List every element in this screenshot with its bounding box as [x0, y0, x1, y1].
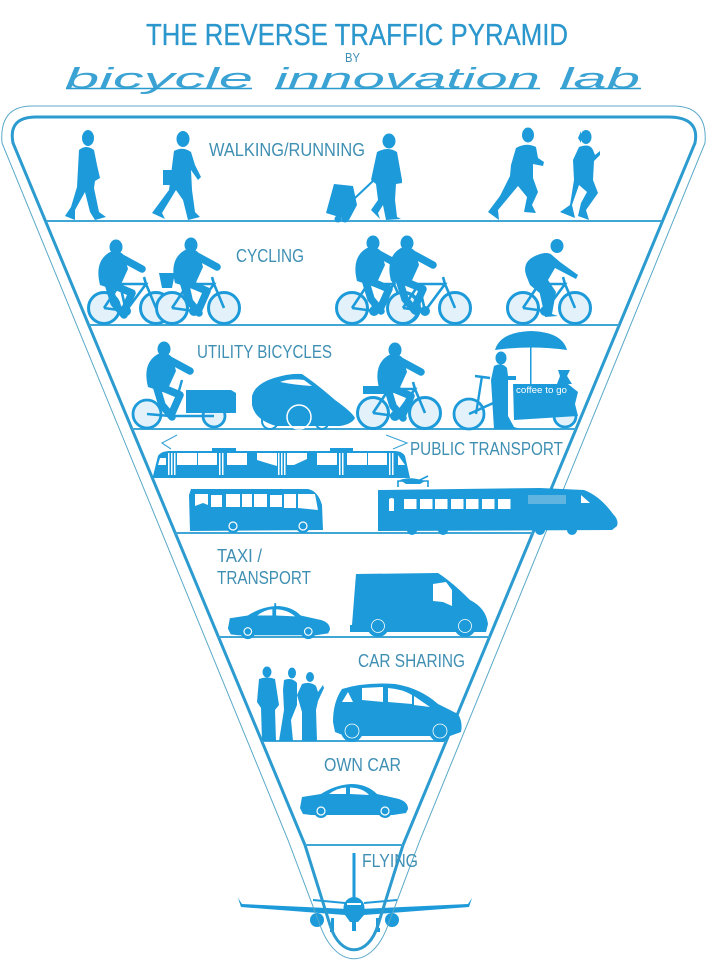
label: taxi / transport: TAXI /: [217, 546, 262, 566]
panel: cycling: [88, 236, 590, 324]
icon: sedan car: [300, 784, 408, 818]
logo: bicycle innovation lab: [65, 63, 641, 95]
label: flying: FLYING: [362, 851, 418, 871]
label: taxi / transport: TRANSPORT: [217, 568, 311, 588]
panel: own car: [300, 755, 408, 818]
icon: velomobile: [252, 374, 355, 429]
label: taxi / transport: [217, 546, 311, 588]
icon: person with shopping trolley: [326, 134, 402, 222]
title: THE REVERSE TRAFFIC PYRAMID: [146, 17, 568, 52]
logo: bicycle innovation lab: lab: [560, 63, 640, 95]
icon: tram: [153, 435, 410, 478]
icon: van: [350, 573, 488, 637]
tier dividers: [46, 221, 662, 845]
icon: high-speed train: [378, 476, 618, 535]
icon: hatchback car: [333, 684, 462, 742]
icon: cyclist 1: [88, 240, 172, 324]
icon: racing cyclist: [508, 239, 590, 324]
icon: airplane: [238, 853, 472, 932]
label: own car: OWN CAR: [324, 755, 401, 775]
label: utility bicycles: UTILITY BICYCLES: [197, 342, 332, 362]
icon: bus: [189, 489, 323, 533]
panel: utility bicycles: [133, 331, 578, 429]
icon: coffee cargo bike with umbrella: [454, 331, 578, 429]
icon: cyclist 2 with basket: [156, 238, 240, 324]
label: walking/running: WALKING/RUNNING: [209, 140, 365, 160]
panel: car sharing: [257, 651, 465, 742]
logo: bicycle innovation lab: bicycle: [65, 63, 253, 95]
icon: taxi: [228, 603, 330, 639]
icon: cargo bike: [133, 342, 236, 428]
icon: runner 1: [488, 128, 544, 220]
label: cycling: CYCLING: [236, 246, 304, 266]
by line: BY: [345, 50, 360, 65]
icon: walker 1: [65, 130, 106, 220]
icon: three people: [257, 666, 324, 741]
label: car sharing: CAR SHARING: [358, 651, 465, 671]
icon: walker 2 with bag: [152, 131, 201, 220]
cart text: coffee to go: [516, 385, 567, 395]
icon: cyclist with rack: [358, 342, 440, 428]
label: public transport: PUBLIC TRANSPORT: [410, 439, 563, 459]
icon: cyclist 3: [336, 236, 420, 324]
panel: public transport: [153, 435, 618, 535]
icon: runner 2: [560, 130, 600, 220]
panel: taxi / transport: [217, 546, 488, 639]
icon: cyclist 4: [388, 236, 470, 324]
logo: bicycle innovation lab: innovation: [275, 63, 540, 95]
panel: walking/running: [65, 128, 600, 222]
